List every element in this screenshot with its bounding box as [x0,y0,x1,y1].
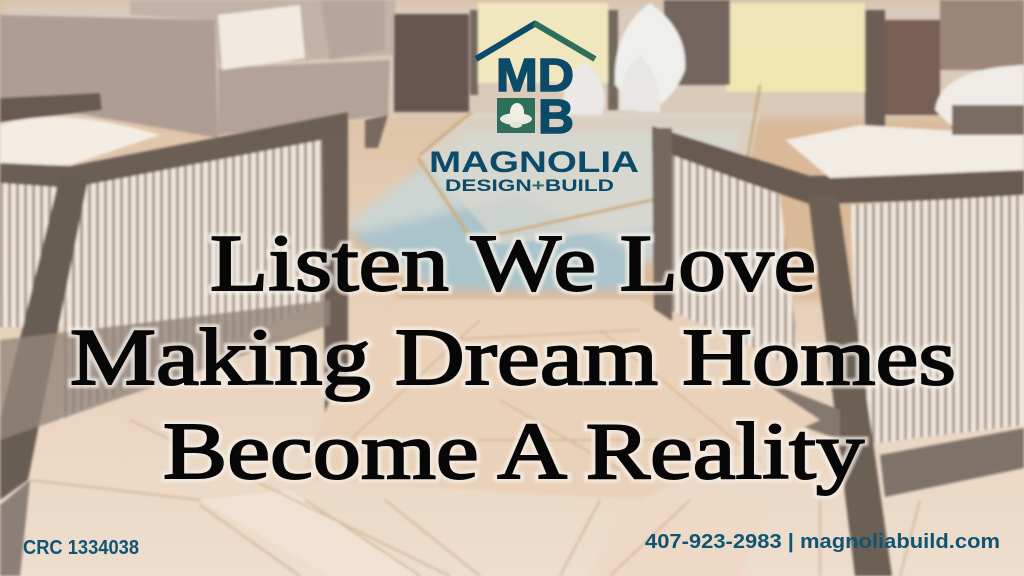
logo letter B: B [538,91,574,144]
sofa left [0,15,218,138]
right chair [652,126,1024,204]
logo wordmark: MAGNOLIA [429,146,639,179]
title halo: Making Dream Homes [70,314,956,402]
floor planks [200,490,420,576]
title halo [70,220,956,496]
pineapples [615,3,685,112]
license number: CRC 1334038 [23,537,139,559]
yellow chairs [478,3,608,83]
contact details: 407-923-2983 | magnoliabuild.com [645,531,1000,553]
logo letters MD: MD [496,49,574,101]
glass table [420,112,760,245]
left chair [0,93,102,122]
title line 2: Making Dream Homes [70,314,956,402]
title line 1: Listen We Love [210,220,816,308]
title halo: Listen We Love [210,220,816,308]
logo: Magnolia Design+Build [429,23,639,195]
icon: house roof [476,23,595,59]
icon: magnolia flower square [497,98,535,133]
logo tagline: DESIGN +BUILD [445,176,614,195]
title line 3: Become A Reality [163,408,864,496]
title [70,220,956,496]
title halo: Become A Reality [163,408,864,496]
